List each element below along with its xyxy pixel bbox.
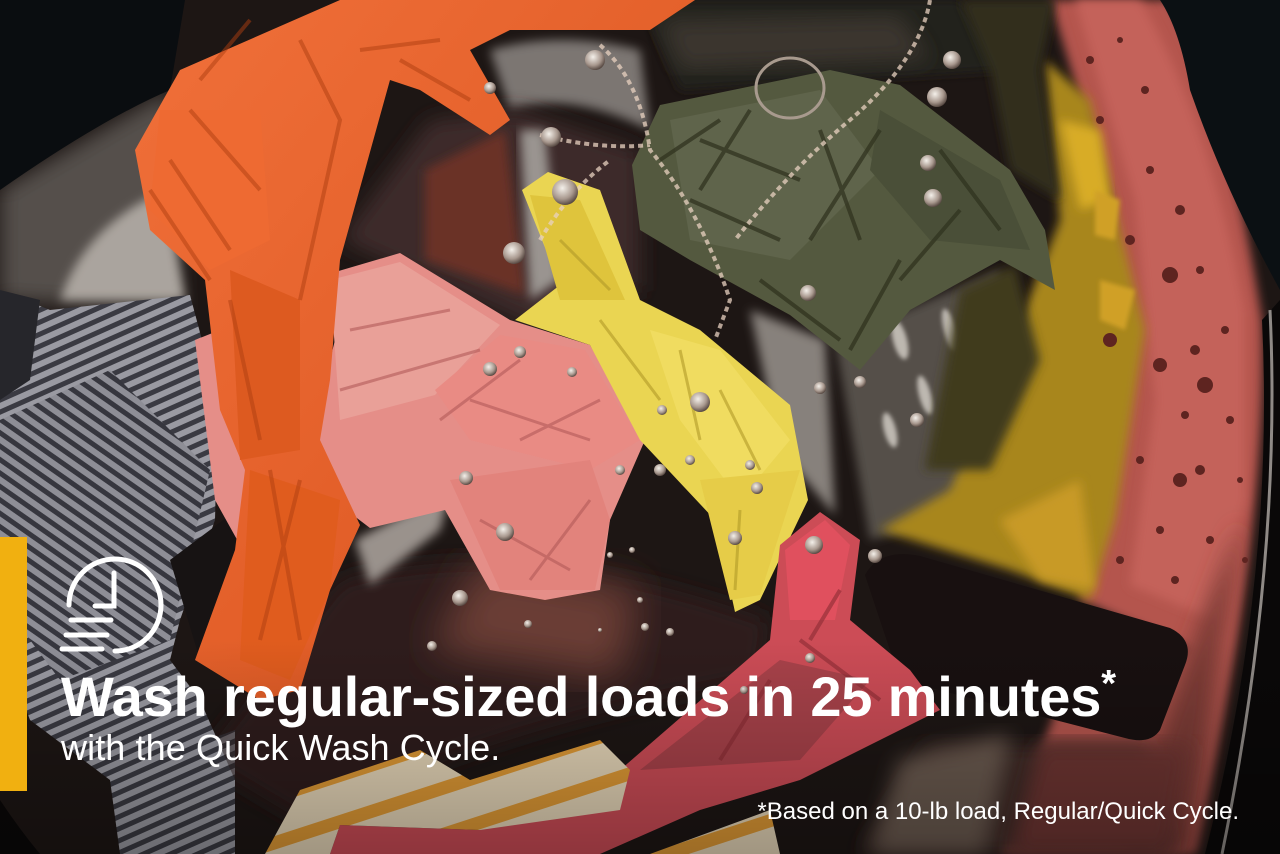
yellow striped garment (265, 740, 780, 854)
heading: Wash regular-sized loads in 25 minutes* (61, 663, 1116, 728)
subheading: with the Quick Wash Cycle. (61, 727, 500, 768)
pink garment (195, 253, 645, 600)
red pink garment (330, 512, 940, 854)
striped grey shirt (0, 290, 260, 854)
water splash and droplets (427, 0, 961, 694)
drum right wall: red and yellow reflections (860, 0, 1263, 854)
footnote: *Based on a 10-lb load, Regular/Quick Cycle. (757, 798, 1239, 825)
orange garment (135, 0, 695, 700)
yellow garment (515, 172, 808, 612)
olive green garment (632, 70, 1055, 370)
black paddle (865, 554, 1188, 740)
yellow accent bar (0, 537, 27, 791)
